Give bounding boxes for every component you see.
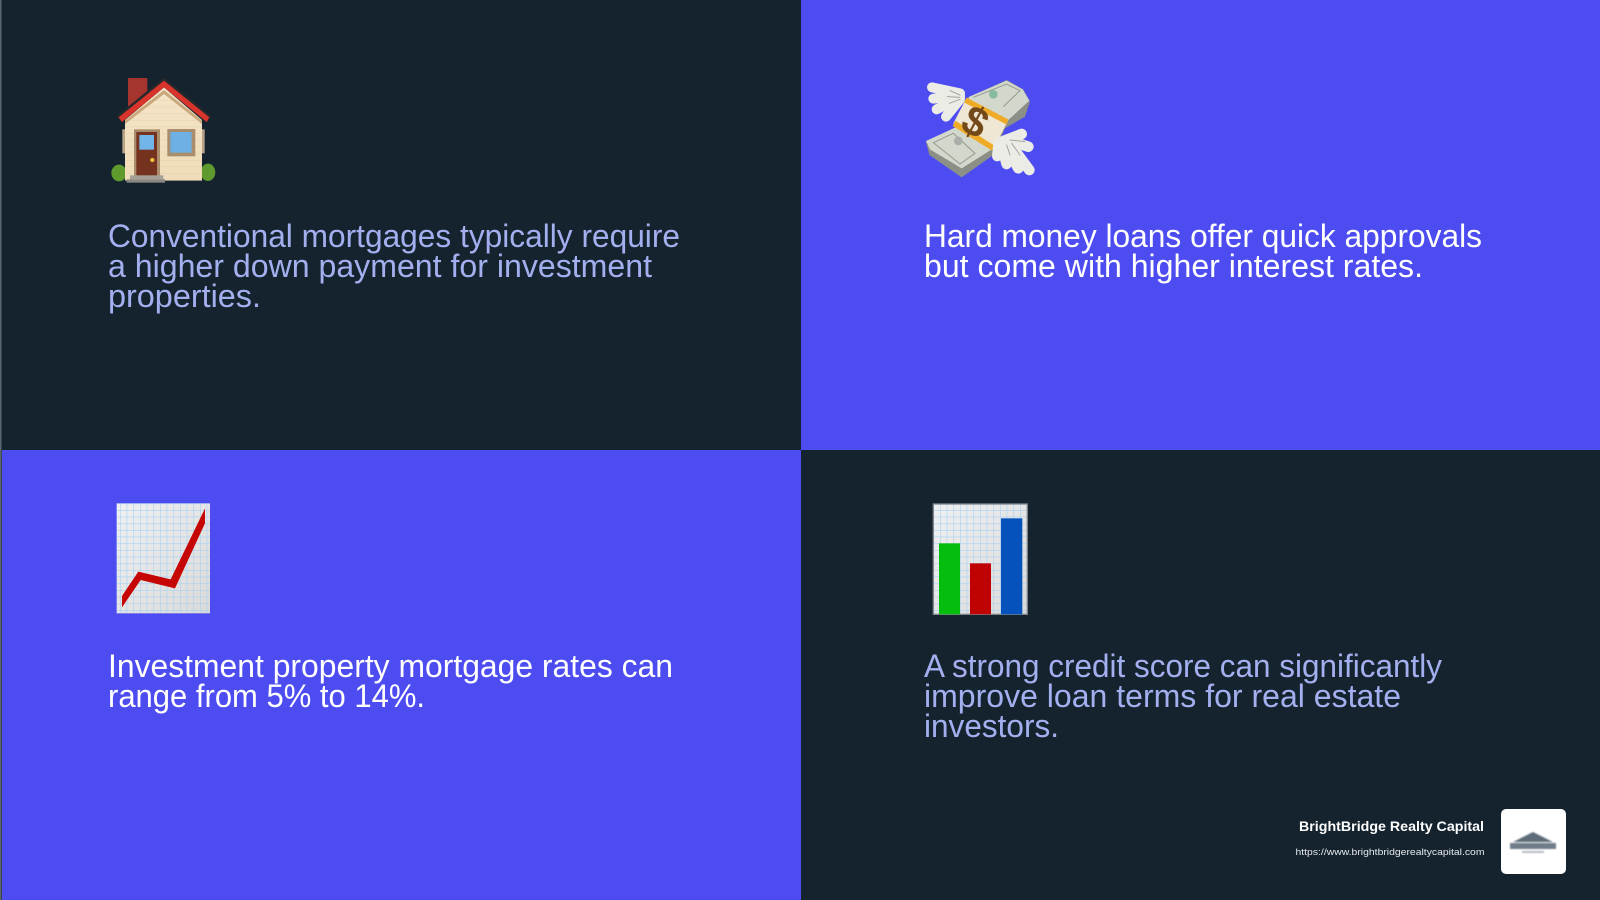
icon: money with wings <box>926 80 1030 177</box>
icon: house <box>111 77 215 183</box>
panel: conventional mortgages <box>2 0 801 450</box>
wing: upper left <box>932 87 960 117</box>
brand name: BrightBridge Realty Capital <box>1299 818 1484 834</box>
text: mortgage rates: range from 5% to 14%. <box>108 678 425 714</box>
text: credit score: investors. <box>924 708 1059 744</box>
text: credit score: A strong credit score can significantly <box>924 648 1442 684</box>
text: mortgage rates: Investment property mortgage rates can <box>108 648 673 684</box>
text: conventional mortgages <box>108 218 680 314</box>
brand url: https://www.brightbridgerealtycapital.com <box>1296 847 1485 858</box>
panel: mortgage rates <box>2 450 801 900</box>
logo <box>1501 809 1566 874</box>
text: hard money loans: Hard money loans offer quick approvals <box>924 218 1482 254</box>
brand footer <box>1296 809 1566 874</box>
text: conventional mortgages: properties. <box>108 278 261 314</box>
text: hard money loans: but come with higher interest rates. <box>924 248 1423 284</box>
icon: money with wings: $ <box>954 95 997 148</box>
text: credit score <box>924 648 1442 744</box>
text: conventional mortgages: Conventional mortgages typically require <box>108 218 680 254</box>
text: mortgage rates <box>108 648 673 714</box>
text: credit score: improve loan terms for real estate <box>924 678 1401 714</box>
text: hard money loans <box>924 218 1482 284</box>
panel: hard money loans <box>801 0 1600 450</box>
text: conventional mortgages: a higher down payment for investment <box>108 248 652 284</box>
icon: chart trending up <box>117 503 210 613</box>
icon: bar chart <box>933 504 1027 614</box>
panel: credit score <box>801 450 1600 900</box>
wing: lower right <box>997 134 1029 170</box>
